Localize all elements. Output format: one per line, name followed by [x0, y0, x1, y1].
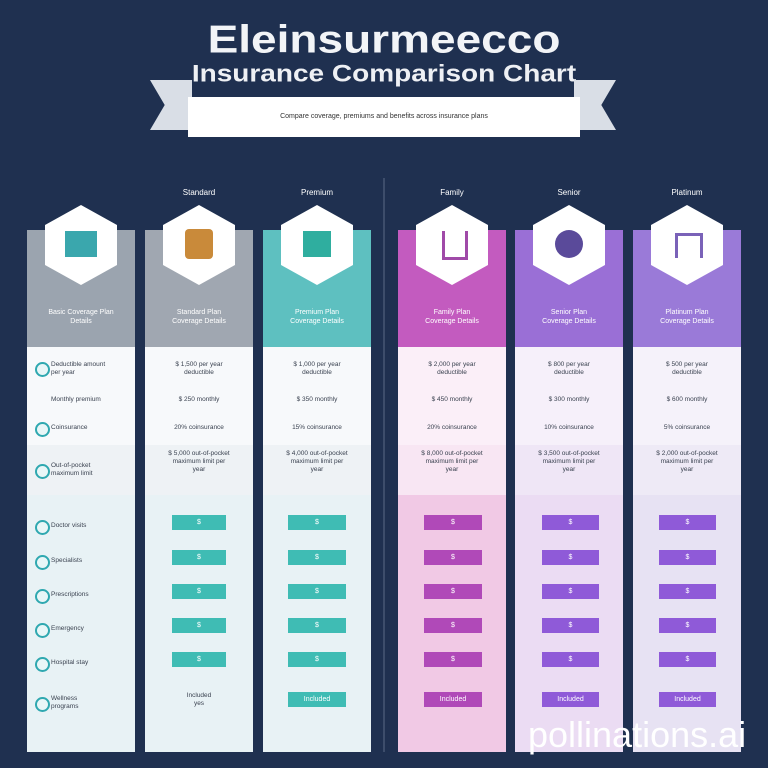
- column 5: year: [563, 466, 575, 473]
- column 3: $ 350 monthly: [297, 396, 337, 403]
- column 2: $: [197, 588, 201, 595]
- column 6: $ 500 per year: [666, 361, 708, 368]
- column 1: maximum limit: [51, 470, 93, 477]
- column 4: year: [446, 466, 458, 473]
- column 2: [145, 230, 253, 752]
- column 4: 20% coinsurance: [427, 424, 477, 431]
- column 3: maximum limit per: [291, 458, 343, 465]
- column 3: year: [311, 466, 323, 473]
- column 2: 20% coinsurance: [174, 424, 224, 431]
- column 2: $ 5,000 out-of-pocket: [168, 450, 230, 457]
- column labels: Platinum: [671, 188, 703, 197]
- title: Eleinsurmeecco: [208, 17, 560, 61]
- column 2: $: [197, 519, 201, 526]
- column 6: year: [681, 466, 693, 473]
- column 1: Wellness: [51, 695, 77, 702]
- column 1: Specialists: [51, 557, 82, 564]
- hexagon icons: [45, 205, 723, 285]
- column 6: 5% coinsurance: [664, 424, 710, 431]
- column labels: Family: [440, 188, 464, 197]
- column 4: $: [451, 588, 455, 595]
- column 5: $ 3,500 out-of-pocket: [538, 450, 600, 457]
- column labels: Standard: [183, 188, 215, 197]
- column 5: $ 800 per year: [548, 361, 590, 368]
- column 1: per year: [51, 369, 75, 376]
- column 2: $ 250 monthly: [179, 396, 219, 403]
- column 3: [263, 230, 371, 752]
- column 5: $: [569, 588, 572, 595]
- column 3: $ 1,000 per year: [293, 361, 341, 368]
- column 2: yes: [194, 700, 204, 707]
- column 2: $: [197, 622, 201, 629]
- column 5: $: [569, 656, 572, 663]
- column 1: Basic Coverage Plan: [48, 309, 114, 316]
- column 3: deductible: [302, 369, 332, 376]
- column 3: $: [315, 656, 319, 663]
- column 2: maximum limit per: [173, 458, 225, 465]
- column 1: Coinsurance: [51, 424, 88, 431]
- column 2: $: [197, 656, 201, 663]
- column 6: $: [686, 554, 689, 561]
- column 1: [27, 230, 135, 752]
- column 4: Family Plan: [434, 309, 470, 316]
- column 4: $ 8,000 out-of-pocket: [421, 450, 483, 457]
- ribbon banner: [150, 80, 616, 137]
- column 4: deductible: [437, 369, 467, 376]
- column 3: $: [315, 622, 319, 629]
- column 5: $: [569, 554, 572, 561]
- column 6: $: [686, 588, 689, 595]
- column 5: Coverage Details: [542, 318, 596, 325]
- column 2: $: [197, 554, 201, 561]
- column 3: $: [315, 554, 319, 561]
- column 4: $: [451, 554, 455, 561]
- column 3: Premium Plan: [295, 309, 339, 316]
- column 1: Out-of-pocket: [51, 462, 90, 469]
- column 6: Platinum Plan: [665, 309, 709, 316]
- column 2: Included: [187, 692, 211, 699]
- column 1: programs: [51, 703, 78, 710]
- column 1: Details: [70, 318, 92, 325]
- column 6: $: [686, 519, 689, 526]
- ribbon banner: Compare coverage, premiums and benefits across insurance plans: [280, 113, 488, 120]
- column 5: $: [569, 519, 572, 526]
- divider: [383, 178, 385, 752]
- column 1: Hospital stay: [51, 659, 88, 666]
- column 4: $ 450 monthly: [432, 396, 472, 403]
- watermark: pollinations.ai: [528, 714, 746, 755]
- column 4: $: [451, 622, 455, 629]
- column 2: deductible: [184, 369, 214, 376]
- column 1: Deductible amount: [51, 361, 105, 368]
- column 4: maximum limit per: [426, 458, 478, 465]
- column 4: $: [451, 519, 455, 526]
- column 3: Coverage Details: [290, 318, 344, 325]
- column 6: $ 600 monthly: [667, 396, 707, 403]
- column 6: [633, 230, 741, 752]
- column 5: $: [569, 622, 572, 629]
- column 2: $ 1,500 per year: [175, 361, 223, 368]
- column 5: [515, 230, 623, 752]
- column 5: maximum limit per: [543, 458, 595, 465]
- column 3: $: [315, 588, 319, 595]
- column 5: deductible: [554, 369, 584, 376]
- column 1: Doctor visits: [51, 522, 86, 529]
- column 4: $ 2,000 per year: [428, 361, 476, 368]
- column labels: [183, 188, 703, 197]
- column 4: [398, 230, 506, 752]
- subtitle: Insurance Comparison Chart: [192, 60, 576, 87]
- column labels: Senior: [557, 188, 581, 197]
- column 4: $: [451, 656, 455, 663]
- column 1: Emergency: [51, 625, 84, 632]
- column 2: Standard Plan: [177, 309, 221, 316]
- column 3: 15% coinsurance: [292, 424, 342, 431]
- column 6: $: [686, 656, 689, 663]
- column 6: $: [686, 622, 689, 629]
- column 6: Coverage Details: [660, 318, 714, 325]
- column 6: $ 2,000 out-of-pocket: [656, 450, 718, 457]
- column 5: $ 300 monthly: [549, 396, 589, 403]
- column 1: Monthly premium: [51, 396, 101, 403]
- column 2: Coverage Details: [172, 318, 226, 325]
- column 6: Included: [674, 696, 701, 703]
- column 5: 10% coinsurance: [544, 424, 594, 431]
- column 3: $: [315, 519, 319, 526]
- column 4: Coverage Details: [425, 318, 479, 325]
- column 6: maximum limit per: [661, 458, 713, 465]
- column 6: deductible: [672, 369, 702, 376]
- column 5: Included: [557, 696, 584, 703]
- column 1: Prescriptions: [51, 591, 89, 598]
- column 3: Included: [304, 696, 330, 703]
- column 2: year: [193, 466, 205, 473]
- column labels: Premium: [301, 188, 333, 197]
- column 4: Included: [440, 696, 466, 703]
- column 5: Senior Plan: [551, 309, 587, 316]
- column 3: $ 4,000 out-of-pocket: [286, 450, 348, 457]
